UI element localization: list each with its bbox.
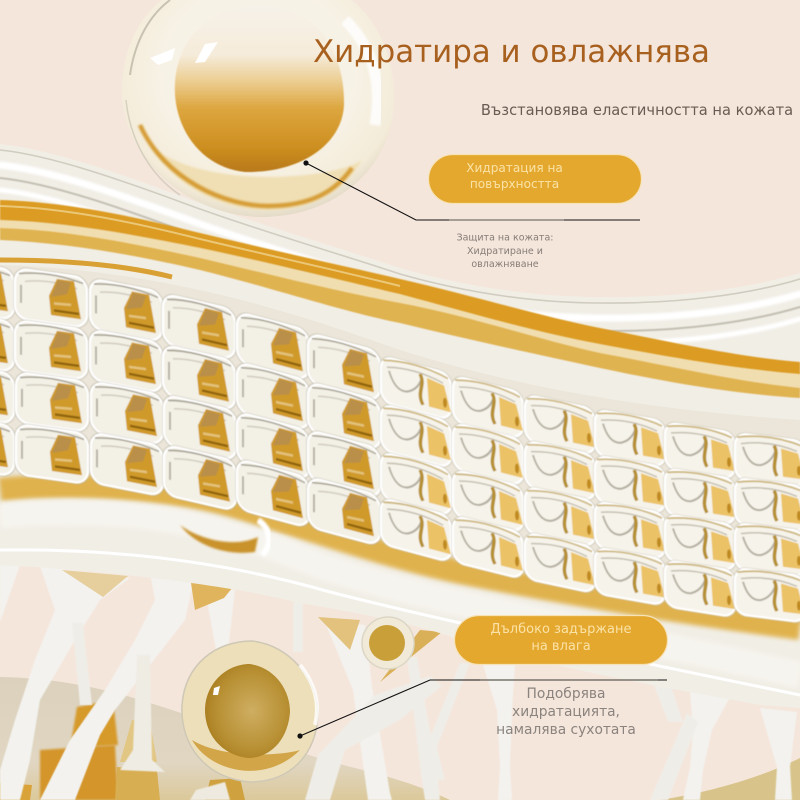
tray base left: [0, 677, 450, 800]
tiny droplet: [362, 617, 414, 669]
leader line bottom: [297, 680, 667, 739]
gel struts: [0, 565, 797, 800]
cream fill between stripes: [0, 220, 800, 392]
pill: deep moisture retention: Дълбоко задържане: [490, 622, 632, 637]
pill: deep moisture retention: на влага: [531, 639, 591, 654]
caption: improves hydration: намалява сухотата: [496, 722, 636, 738]
gold fringe under cells: [0, 486, 800, 628]
tray base right: [660, 758, 800, 800]
gold stripe main: [0, 200, 800, 374]
gold strut tops: [62, 570, 442, 682]
caption: improves hydration: хидратацията,: [512, 704, 620, 720]
title: Хидратира и овлажнява: [313, 34, 710, 70]
gold stripe secondary: [0, 228, 800, 398]
pill: surface hydration: повърхността: [470, 177, 559, 191]
leader line top: [303, 160, 640, 220]
caption: skin protection: Защита на кожата:: [457, 232, 553, 244]
caption: improves hydration: Подобрява: [527, 686, 605, 702]
small droplet: [182, 641, 318, 782]
white gel band: [0, 144, 800, 708]
honeycomb base: [0, 265, 800, 625]
caption: improves hydration: [496, 686, 636, 738]
upper wisps: [0, 150, 800, 343]
thin gold seam: [0, 260, 172, 277]
pill: surface hydration: Хидратация на: [466, 161, 563, 175]
caption: skin protection: Хидратиране и: [467, 246, 543, 257]
honeycomb cells: [0, 258, 800, 625]
lower band highlights: [0, 512, 800, 695]
stripe highlight: [0, 206, 400, 286]
caption: skin protection: овлажняване: [471, 259, 539, 270]
subtitle: Възстановява еластичността на кожата: [481, 102, 793, 119]
pill: deep moisture retention: [454, 616, 668, 664]
caption: skin protection: [457, 232, 553, 270]
gold pools behind struts: [0, 700, 245, 800]
pill: surface hydration: [428, 154, 642, 204]
large droplet: [122, 0, 394, 217]
